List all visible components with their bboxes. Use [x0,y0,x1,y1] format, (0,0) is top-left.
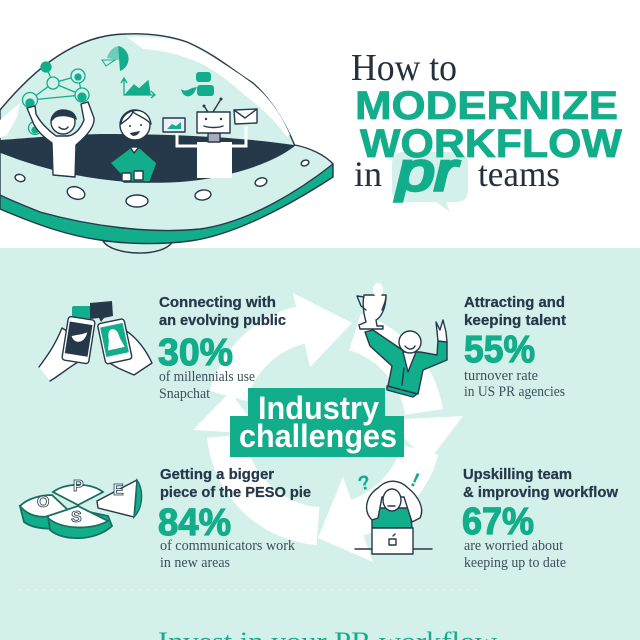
block: upskilling team and improving workflow [462,467,619,571]
block: connecting with an evolving public: Connecting with [159,295,276,311]
floating network diagram [22,62,89,134]
block: connecting with an evolving public [158,295,286,402]
question and exclamation marks [356,469,423,496]
block: upskilling team and improving workflow: & improving workflow [463,485,619,501]
faint dotted divider [18,589,480,591]
saucer hull [0,145,333,230]
robot with chart and envelope [163,98,257,178]
floating flow shapes and bird [181,72,214,96]
floating pie chart [102,46,129,71]
icon: stressed woman at laptop [355,469,432,554]
question and exclamation marks: ! [407,469,423,492]
title line: WORKFLOW: WORKFLOW [360,122,622,166]
title line: MODERNIZE: MODERNIZE [355,84,618,128]
icon: hands holding phones [39,301,152,381]
PESO letters: P [73,478,84,495]
title PR lettering: pr [395,142,460,202]
block: connecting with an evolving public: Snapchat [159,386,210,402]
dome highlights [127,37,290,137]
glass dome [0,34,295,150]
block: bigger piece of the PESO pie: of communicators work [160,538,296,554]
block: bigger piece of the PESO pie: in new areas [160,555,230,571]
portholes [14,159,310,207]
center label: Industry challenges: Industry [258,390,379,426]
PESO letters: O [37,494,49,511]
block: attracting and keeping talent: keeping talent [464,313,566,329]
block: attracting and keeping talent: in US PR agencies [464,384,565,400]
title line: teams: teams [478,154,560,194]
block: attracting and keeping talent [464,295,566,400]
block: upskilling team and improving workflow: Upskilling team [463,467,572,483]
title line: in: in [354,154,382,194]
center label: Industry challenges: challenges [239,418,397,454]
PESO letters: S [71,509,82,526]
block: connecting with an evolving public: 30% [158,332,233,374]
saucer green rim [0,164,333,244]
block: bigger piece of the PESO pie: Getting a bigger [160,467,274,483]
title line: How to: How to [351,47,457,89]
block: upskilling team and improving workflow: are worried about [464,538,563,554]
person: man in green sweater [110,110,157,182]
PESO letters [37,478,124,526]
speech bubble behind PR [392,152,468,212]
block: upskilling team and improving workflow: keeping up to date [464,555,566,571]
block: connecting with an evolving public: of millennials use [159,369,255,385]
question and exclamation marks: ? [356,471,373,496]
block: attracting and keeping talent: Attracting and [464,295,565,311]
block: bigger piece of the PESO pie [158,467,311,571]
block: attracting and keeping talent: turnover rate [464,368,538,384]
panel: industry challenges background [0,248,640,640]
block: bigger piece of the PESO pie: 84% [158,502,231,544]
block: upskilling team and improving workflow: 67% [462,501,534,543]
person: woman with raised arms [27,102,94,177]
cycle arrows [193,293,463,562]
PESO letters: E [113,482,124,499]
center label: Industry challenges [230,388,404,457]
title [351,47,622,212]
block: attracting and keeping talent: 55% [464,329,535,371]
floating line chart [121,78,155,98]
cabin opening [0,134,294,183]
illustration: flying saucer with team [0,34,333,253]
icon: man holding trophy [357,283,447,397]
block: bigger piece of the PESO pie: piece of the PESO pie [160,485,311,501]
block: connecting with an evolving public: an evolving public [159,313,286,329]
saucer bottom bump [103,241,173,253]
icon: PESO pie [20,478,142,538]
